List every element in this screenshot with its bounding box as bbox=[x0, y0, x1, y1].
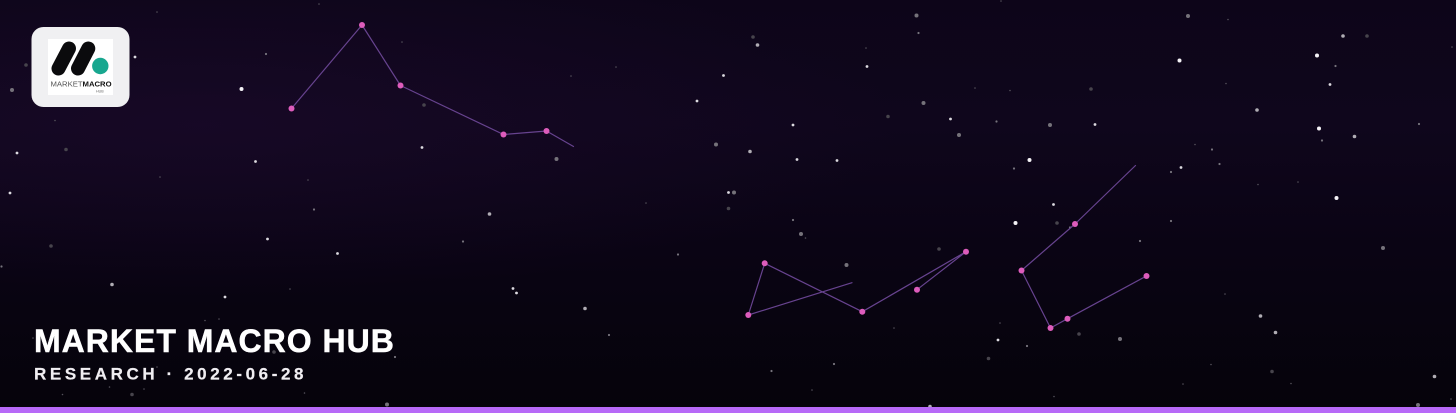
constellation: right bbox=[1018, 166, 1150, 331]
logo mark bbox=[58, 48, 109, 74]
constellation: lower centre bbox=[745, 249, 969, 318]
constellation: upper left bbox=[288, 22, 574, 146]
logo wordmark: MARKETMACRO bbox=[50, 80, 112, 88]
bottom accent bar bbox=[0, 407, 1456, 413]
subtitle: RESEARCH · 2022-06-28 bbox=[34, 364, 307, 384]
logo sub-label: HUB bbox=[96, 90, 104, 94]
logo card bbox=[32, 27, 130, 107]
title: MARKET MACRO HUB bbox=[34, 323, 395, 359]
